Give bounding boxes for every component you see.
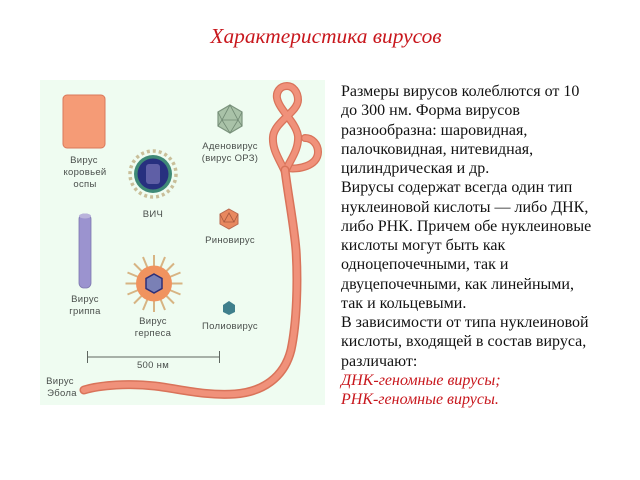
icon: HIV	[130, 151, 176, 197]
rope: Ebola virus	[84, 86, 318, 394]
icon: rhinovirus	[220, 209, 238, 229]
title: Характеристика вирусов	[210, 24, 442, 48]
icon: smallpox virus	[63, 95, 105, 148]
text block: description: Размеры вирусов колеблются от 10	[341, 83, 579, 100]
label: herpes virus: герпеса	[135, 328, 172, 339]
label: poliovirus: Полиовирус	[202, 321, 258, 332]
label: influenza virus: Вирус	[71, 294, 99, 305]
label: adenovirus: Аденовирус	[202, 141, 258, 152]
text block: description: цилиндрическая и др.	[341, 160, 489, 177]
text block: description: разнообразна: шаровидная,	[341, 122, 527, 138]
label: Ebola virus: Вирус	[46, 376, 74, 387]
text block: description: одноцепочечными, так и	[341, 256, 508, 273]
text block: description: до 300 нм. Форма вирусов	[341, 102, 520, 119]
text block: description: кислоты могут быть как	[341, 237, 505, 254]
icon: adenovirus	[218, 105, 242, 133]
text block: description: различают:	[341, 352, 417, 370]
text block: description: палочковидная, нитевидная,	[341, 141, 533, 158]
text block: description: так и кольцевыми.	[341, 295, 466, 312]
text block: description: двуцепочечными, как линейными,	[341, 276, 574, 292]
label: adenovirus: (вирус ОРЗ)	[202, 153, 258, 164]
text block: description: либо РНК. Причем обе нуклеиновые	[341, 218, 591, 235]
icon: herpes virus	[126, 255, 182, 312]
text block: description: кислоты, входящей в состав вируса,	[341, 333, 586, 350]
label: smallpox virus: оспы	[73, 179, 97, 190]
label: smallpox virus: Вирус	[70, 155, 98, 166]
text block: description: РНК-геномные вирусы.	[341, 391, 499, 408]
panel background	[40, 80, 325, 405]
icon: poliovirus	[223, 301, 235, 315]
text block: description: ДНК-геномные вирусы;	[341, 372, 501, 389]
text block: description: Вирусы содержат всегда один тип	[341, 179, 572, 196]
label: smallpox virus: коровьей	[63, 167, 107, 178]
text block: description: В зависимости от типа нуклеиновой	[341, 314, 589, 331]
scale bar	[88, 351, 220, 363]
text block: description: нуклеиновой кислоты — либо ДНК,	[341, 198, 588, 216]
text block: description	[340, 83, 591, 408]
icon: influenza virus	[79, 214, 91, 288]
label: rhinovirus: Риновирус	[205, 235, 255, 246]
label: HIV: ВИЧ	[143, 209, 163, 220]
label: Ebola virus: Эбола	[47, 388, 77, 399]
label: herpes virus: Вирус	[139, 316, 167, 327]
label: scale: 500 нм	[137, 360, 169, 371]
label: influenza virus: гриппа	[69, 306, 101, 317]
